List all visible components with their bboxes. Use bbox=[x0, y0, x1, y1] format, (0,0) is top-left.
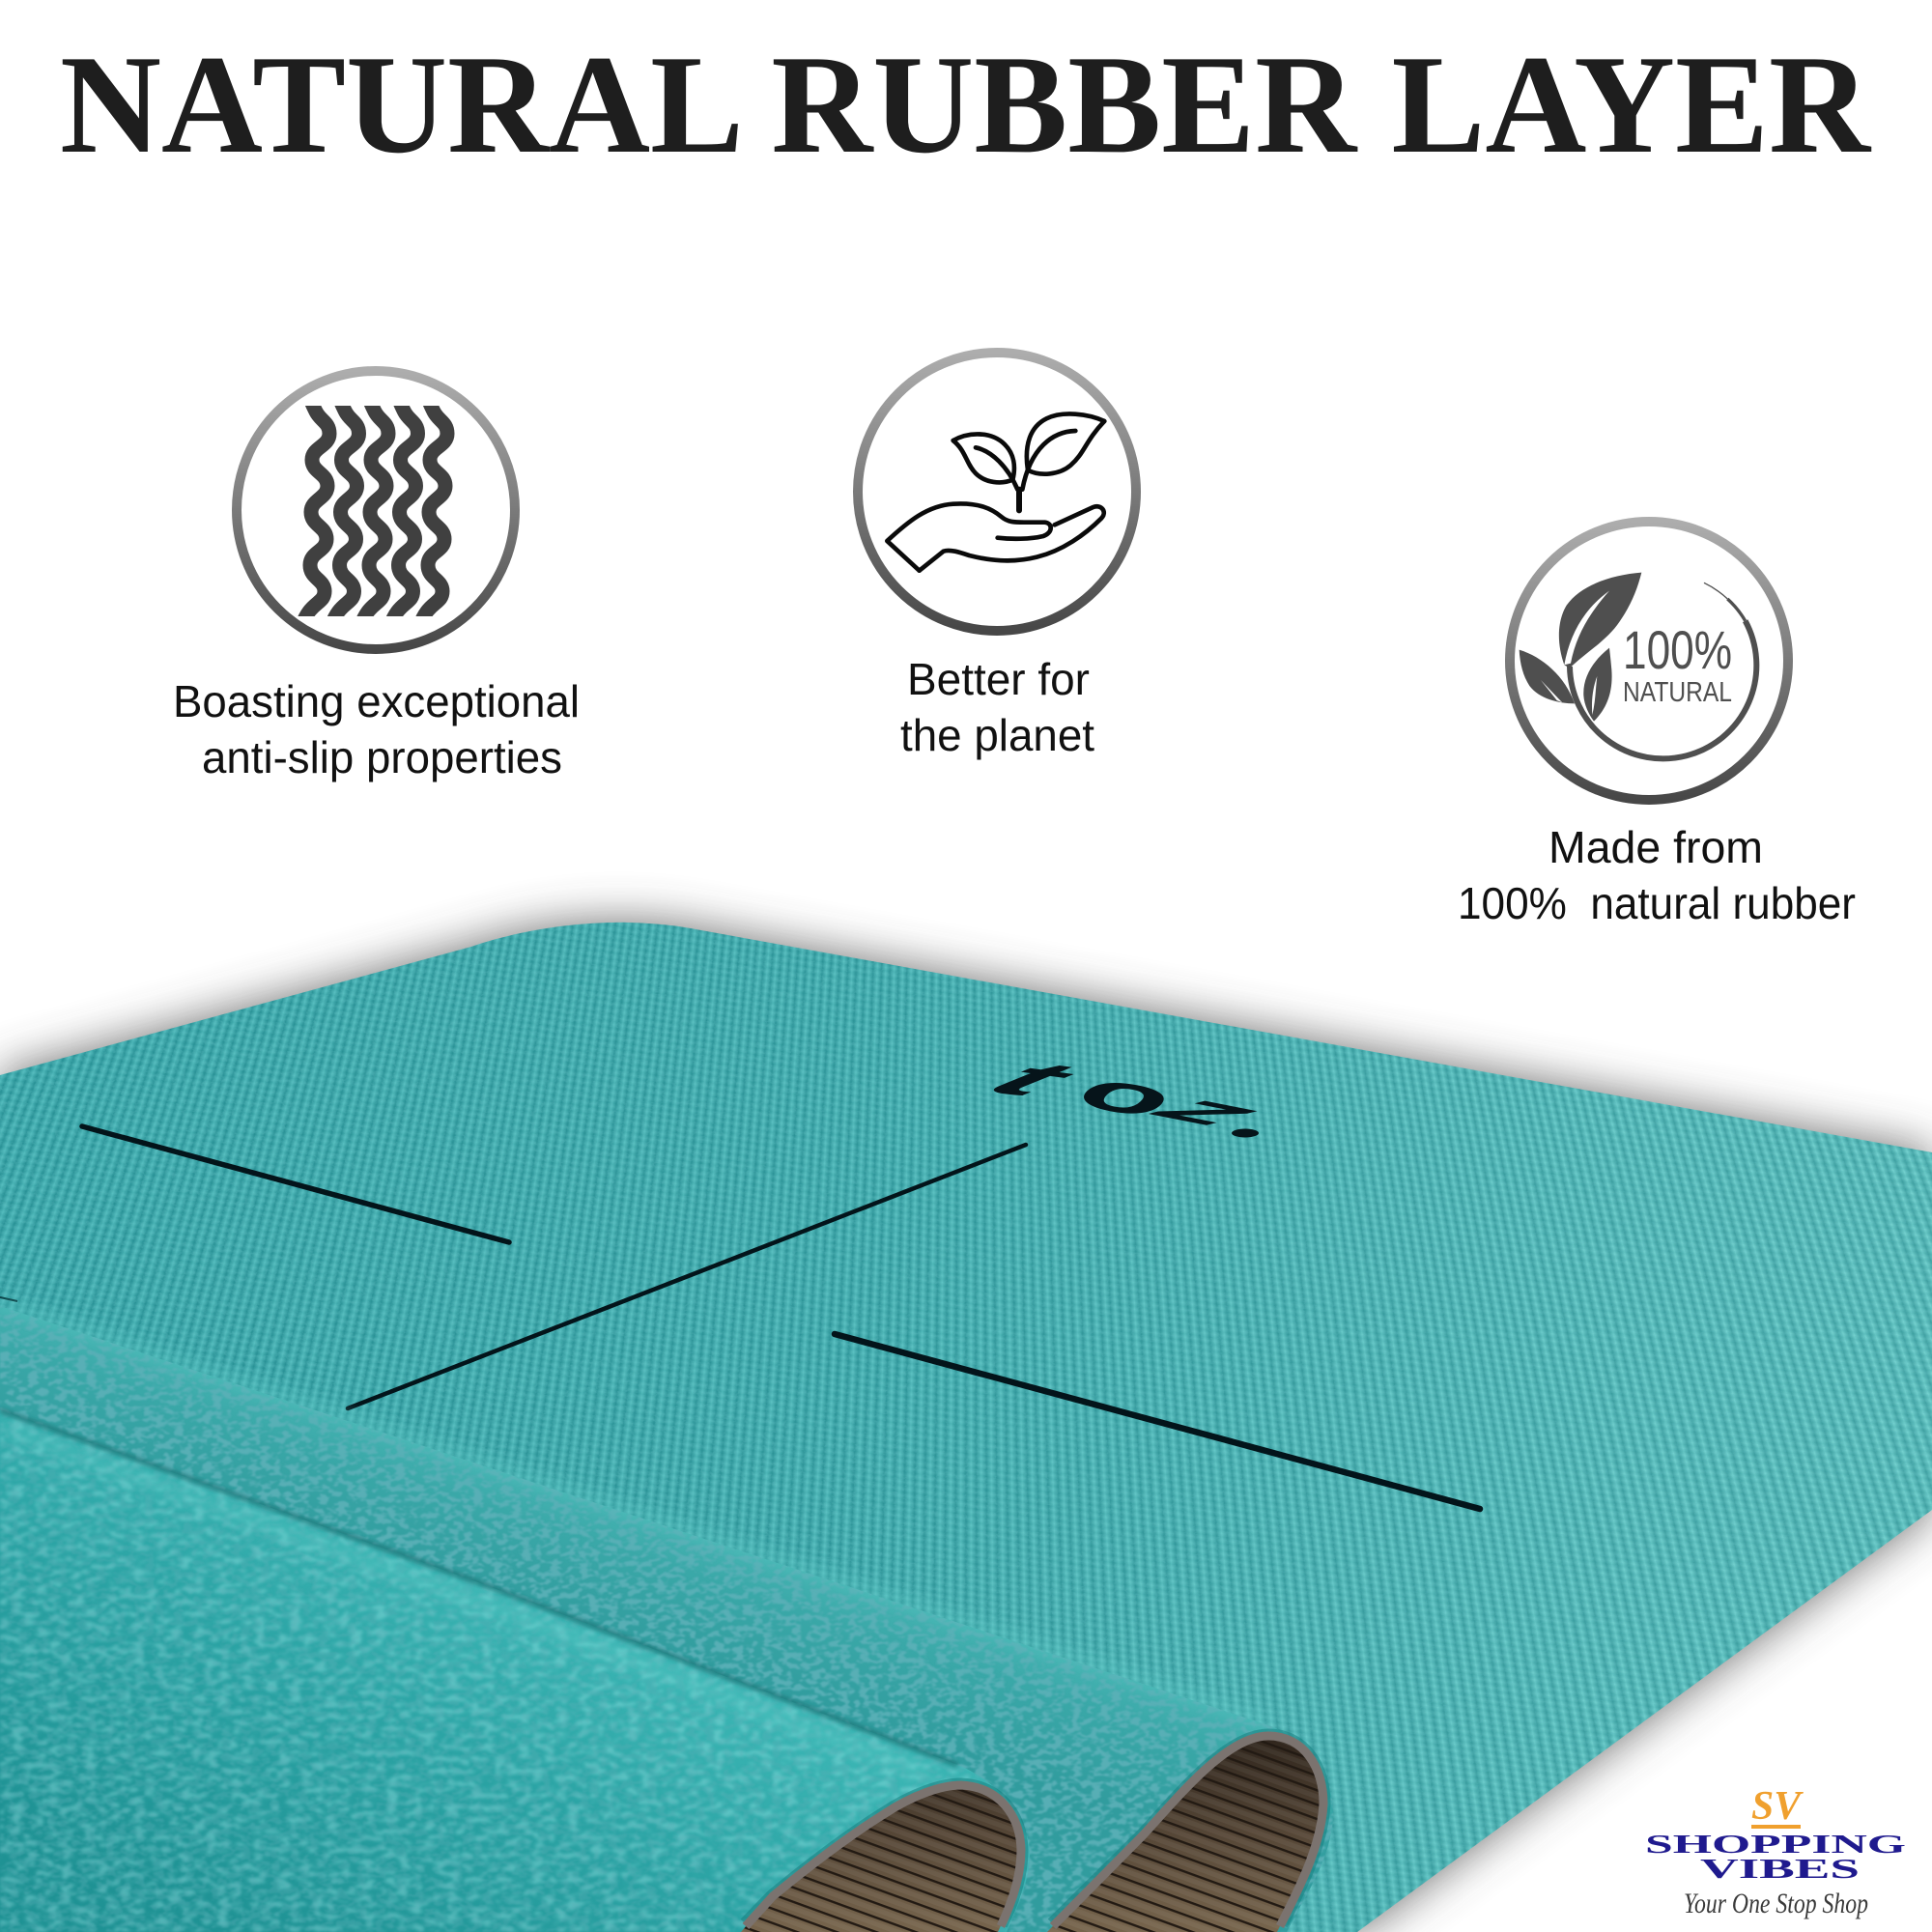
caption: anti-slip bbox=[173, 676, 580, 782]
icon: 100% natural badge bbox=[1510, 522, 1788, 800]
caption: natural bbox=[1458, 822, 1856, 928]
alignment line right bbox=[835, 1334, 1480, 1509]
caption: planet: the planet bbox=[900, 710, 1094, 760]
alignment line diagonal bbox=[348, 1145, 1026, 1408]
caption: planet: Better for bbox=[907, 654, 1090, 704]
feature: anti-slip bbox=[173, 371, 580, 782]
feature: planet bbox=[858, 353, 1136, 760]
brand logo on mat: t bbox=[953, 1053, 1114, 1105]
brand logo: Shopping Vibes: SHOPPING bbox=[1645, 1830, 1906, 1859]
brand logo on mat: z bbox=[1121, 1090, 1303, 1132]
alignment line left bbox=[82, 1126, 509, 1242]
caption: anti-slip: Boasting exceptional bbox=[173, 676, 580, 726]
front roll opening bbox=[724, 1777, 1034, 1932]
second roll opening bbox=[1014, 1719, 1343, 1932]
brand logo on mat bbox=[993, 1065, 1259, 1138]
mat fold: front roll bbox=[0, 1401, 1043, 1932]
brand logo: Shopping Vibes: Your One Stop Shop bbox=[1684, 1888, 1868, 1919]
icon: hand holding seedling bbox=[858, 353, 1136, 631]
product photo: rolled teal yoga mat bbox=[0, 922, 1932, 1932]
caption: natural: 100% natural rubber bbox=[1458, 878, 1856, 928]
caption: planet bbox=[900, 654, 1094, 760]
icon: 100% natural badge: 100% bbox=[1623, 619, 1732, 680]
icon: wavy anti-slip lines bbox=[237, 371, 515, 649]
title: NATURAL RUBBER LAYER bbox=[60, 26, 1872, 183]
icon: 100% natural badge: NATURAL bbox=[1623, 677, 1732, 708]
brand logo on mat: o bbox=[1058, 1060, 1197, 1129]
brand logo: Shopping Vibes bbox=[1645, 1784, 1906, 1919]
feature: natural bbox=[1458, 522, 1856, 928]
short edge line bbox=[0, 1297, 17, 1301]
caption: natural: Made from bbox=[1548, 822, 1763, 872]
caption: anti-slip: anti-slip properties bbox=[202, 732, 562, 782]
brand logo: Shopping Vibes: VIBES bbox=[1700, 1855, 1860, 1885]
brand logo: Shopping Vibes: SV bbox=[1751, 1784, 1804, 1829]
mat surface texture bbox=[0, 908, 1932, 1932]
mat fold: second roll bbox=[0, 1294, 1352, 1932]
